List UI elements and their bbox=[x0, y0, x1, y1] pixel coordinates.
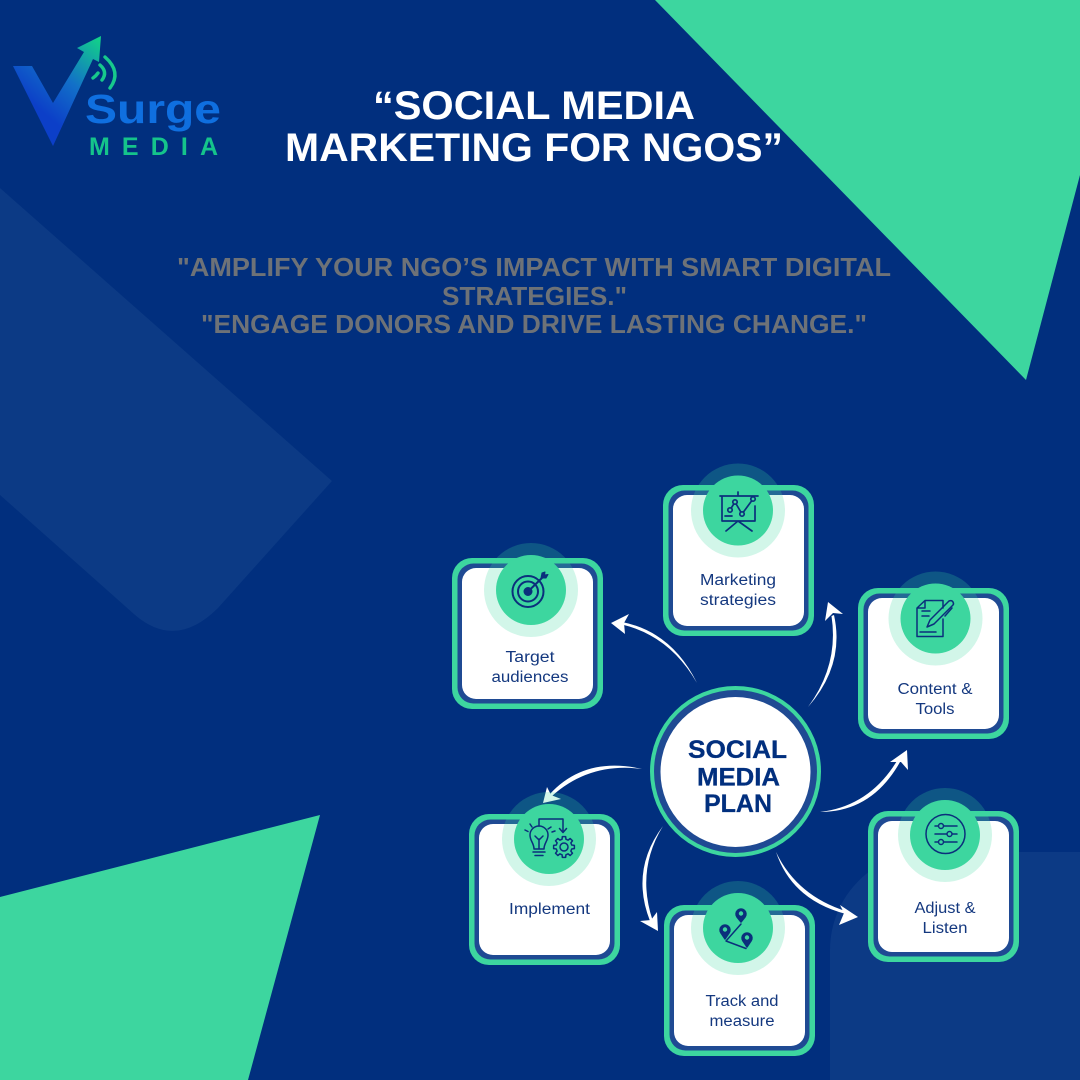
icon: target bbox=[512, 572, 548, 607]
subtitle: STRATEGIES." bbox=[442, 281, 627, 311]
card: content and tools: Tools bbox=[916, 701, 955, 718]
center circle: social media plan: MEDIA bbox=[697, 764, 780, 792]
icon: bulb and gear bbox=[525, 819, 574, 857]
arrow: plan to marketing strategies bbox=[808, 602, 843, 707]
background shape: faint rounded panel bbox=[830, 852, 1080, 1080]
card: marketing strategies: Marketing bbox=[700, 572, 776, 589]
arrow: plan to implement bbox=[543, 766, 642, 803]
background shape: top-right green triangle bbox=[655, 0, 1080, 380]
background shape: faint rounded diamond bbox=[0, 188, 332, 631]
arrow: plan to content and tools bbox=[820, 750, 908, 812]
title bbox=[285, 84, 783, 170]
arrow: plan to target audiences bbox=[611, 614, 697, 683]
card: adjust and listen bbox=[868, 788, 1019, 962]
center circle: social media plan bbox=[650, 686, 821, 857]
arrow: plan to adjust and listen bbox=[776, 852, 858, 925]
card: content and tools: Content & bbox=[898, 681, 973, 698]
subtitle: "AMPLIFY YOUR NGO’S IMPACT WITH SMART DIGITAL bbox=[177, 252, 891, 282]
card: adjust and listen: Adjust & bbox=[914, 900, 976, 917]
card: target audiences: Target bbox=[506, 649, 555, 666]
card: track and measure: Track and bbox=[706, 993, 778, 1010]
center circle: social media plan: PLAN bbox=[704, 790, 772, 818]
background shape: bottom-left green triangle bbox=[0, 815, 320, 1080]
subtitle bbox=[177, 252, 891, 339]
icon: sliders bbox=[926, 814, 965, 854]
card: target audiences: audiences bbox=[492, 669, 569, 686]
logo bbox=[13, 36, 221, 161]
icon: document and pen bbox=[917, 600, 954, 636]
icon: presentation chart bbox=[720, 492, 758, 531]
card: content and tools bbox=[858, 572, 1009, 739]
card: target audiences bbox=[452, 543, 603, 709]
logo: Surge bbox=[85, 86, 221, 132]
card: marketing strategies bbox=[663, 464, 814, 636]
center circle: social media plan: SOCIAL bbox=[688, 736, 787, 764]
arrow: plan to track and measure bbox=[640, 826, 663, 931]
card: adjust and listen: Listen bbox=[922, 920, 968, 937]
card: implement bbox=[469, 792, 620, 965]
icon: map pins bbox=[720, 909, 752, 948]
card: track and measure: measure bbox=[710, 1013, 774, 1030]
title: “SOCIAL MEDIA bbox=[373, 84, 695, 128]
subtitle: "ENGAGE DONORS AND DRIVE LASTING CHANGE." bbox=[201, 309, 867, 339]
logo: MEDIA bbox=[89, 133, 218, 161]
card: implement: Implement bbox=[509, 901, 591, 918]
title: MARKETING FOR NGOS” bbox=[285, 126, 783, 170]
card: track and measure bbox=[664, 881, 815, 1056]
card: marketing strategies: strategies bbox=[700, 592, 776, 609]
